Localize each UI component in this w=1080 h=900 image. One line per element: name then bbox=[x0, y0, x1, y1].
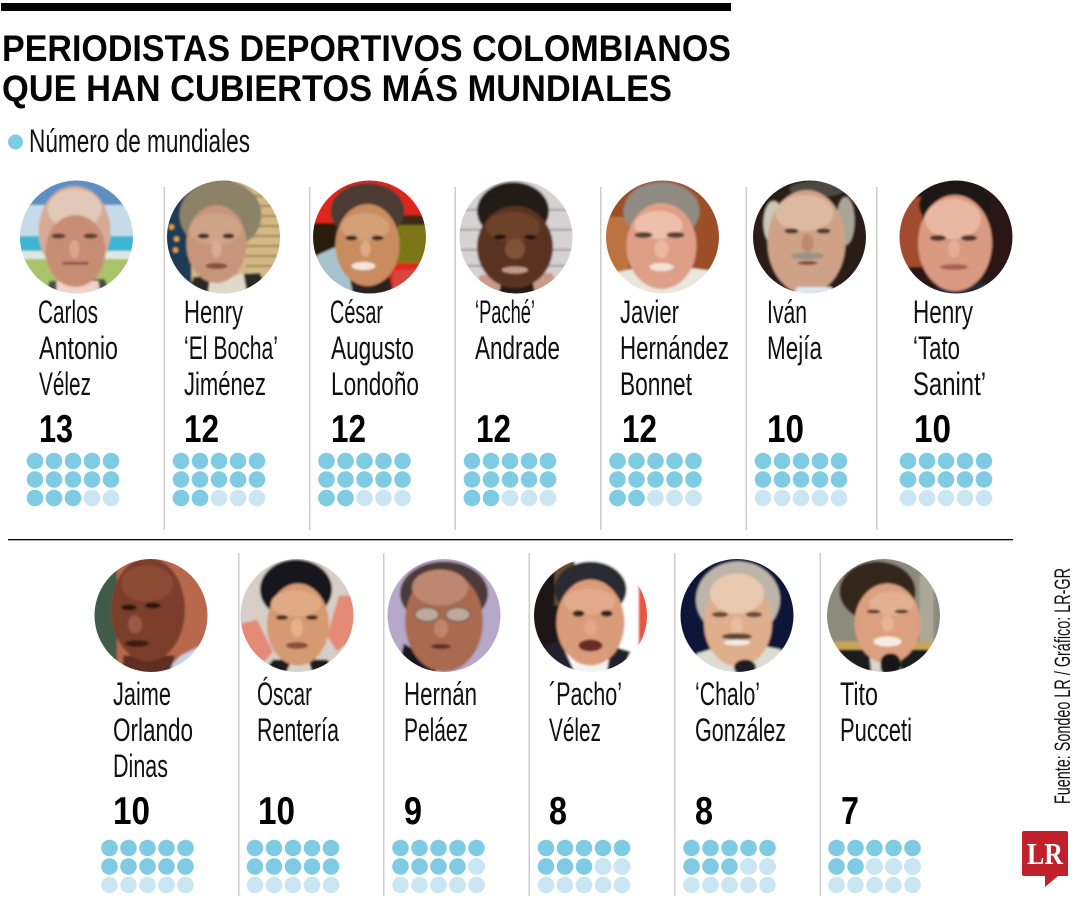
portrait: Jaime Orlando Dinas bbox=[94, 559, 208, 672]
name: Jiménez bbox=[184, 366, 266, 402]
card: Henry 'Tato Sanint' bbox=[896, 177, 1016, 506]
card: Tito Pucceti bbox=[824, 556, 944, 893]
card: César Augusto Londoño bbox=[310, 177, 432, 506]
name bbox=[257, 676, 339, 748]
card: Óscar Rentería bbox=[237, 556, 357, 893]
name bbox=[330, 294, 419, 402]
logo: LR bbox=[1022, 831, 1068, 887]
dots bbox=[609, 453, 702, 506]
value: 12 bbox=[331, 408, 366, 451]
name bbox=[38, 294, 118, 402]
name: Rentería bbox=[257, 712, 339, 748]
name: Andrade bbox=[475, 330, 560, 366]
name: Londoño bbox=[331, 366, 419, 402]
title bbox=[2, 28, 731, 109]
name: Tito bbox=[840, 676, 878, 712]
name bbox=[913, 294, 986, 402]
dots bbox=[755, 453, 847, 506]
value: 10 bbox=[258, 790, 295, 833]
card: Jaime Orlando Dinas bbox=[91, 556, 211, 893]
value: 8 bbox=[549, 790, 567, 833]
name bbox=[620, 294, 729, 402]
value: 13 bbox=[39, 408, 73, 451]
dots bbox=[27, 453, 119, 506]
dots bbox=[101, 840, 194, 893]
value: 10 bbox=[113, 790, 150, 833]
card: Javier Hernández Bonnet bbox=[602, 177, 729, 506]
name: Henry bbox=[913, 294, 973, 330]
name: Henry bbox=[184, 294, 243, 330]
name: Vélez bbox=[549, 712, 601, 748]
card: Iván Mejía bbox=[750, 177, 870, 506]
name: Sanint’ bbox=[913, 366, 986, 402]
legend: Número de mundiales bbox=[29, 123, 250, 159]
name: Orlando bbox=[113, 712, 193, 748]
top rule bbox=[1, 3, 731, 11]
legend bbox=[8, 123, 250, 159]
value: 7 bbox=[841, 790, 859, 833]
portrait: Hernán Peláez bbox=[388, 559, 500, 672]
name: ‘Chalo’ bbox=[695, 676, 760, 712]
name: González bbox=[695, 712, 786, 748]
dots bbox=[392, 840, 485, 893]
value: 12 bbox=[476, 408, 511, 451]
name bbox=[113, 676, 193, 784]
portrait: Javier Hernández Bonnet bbox=[606, 180, 719, 294]
name bbox=[695, 676, 786, 748]
name: Peláez bbox=[404, 712, 468, 748]
value: 12 bbox=[622, 408, 657, 451]
dots bbox=[173, 453, 265, 506]
value: 9 bbox=[404, 790, 422, 833]
name: ‘Paché’ bbox=[475, 294, 535, 330]
name: ‘Tato bbox=[913, 330, 960, 366]
name: Mejía bbox=[767, 330, 822, 366]
title: QUE HAN CUBIERTOS MÁS MUNDIALES bbox=[2, 68, 672, 109]
portrait: Carlos Antonio Vélez bbox=[20, 180, 133, 294]
title: PERIODISTAS DEPORTIVOS COLOMBIANOS bbox=[2, 28, 731, 69]
value: 8 bbox=[695, 790, 713, 833]
name: ‘El Bocha’ bbox=[184, 330, 278, 366]
card: 'Paché' Andrade bbox=[456, 177, 576, 506]
name: César bbox=[330, 294, 383, 330]
card: 'Pacho' Vélez bbox=[530, 556, 652, 893]
name: Javier bbox=[620, 294, 679, 330]
name: Carlos bbox=[38, 294, 98, 330]
portrait: Paché Andrade bbox=[460, 180, 572, 294]
dots bbox=[900, 453, 992, 506]
name: Hernán bbox=[404, 676, 477, 712]
portrait: Chalo González bbox=[680, 559, 794, 672]
card: 'Chalo' González bbox=[677, 556, 797, 893]
name bbox=[549, 676, 622, 748]
value: 10 bbox=[767, 408, 804, 451]
dots bbox=[683, 840, 776, 893]
name: Augusto bbox=[331, 330, 414, 366]
portrait: Pacho Vélez bbox=[534, 560, 647, 672]
dots bbox=[464, 453, 556, 506]
dots bbox=[828, 840, 921, 893]
portrait: Tito Pucceti bbox=[827, 559, 940, 672]
name: Antonio bbox=[39, 330, 118, 366]
dots bbox=[318, 453, 411, 506]
logo: LR: LR bbox=[1027, 836, 1064, 871]
name: Óscar bbox=[257, 676, 312, 712]
card: Carlos Antonio Vélez bbox=[16, 177, 136, 506]
portrait: Óscar Rentería bbox=[240, 559, 354, 672]
source note: Fuente: Sondeo LR / Gráfico: LR-GR bbox=[1050, 568, 1075, 804]
name: Jaime bbox=[113, 676, 171, 712]
dots bbox=[247, 840, 339, 893]
dots bbox=[538, 840, 630, 893]
name: Pucceti bbox=[840, 712, 912, 748]
value: 10 bbox=[914, 408, 951, 451]
portrait: César Augusto Londoño bbox=[313, 180, 426, 294]
portrait: Iván Mejía bbox=[753, 180, 866, 294]
name: Vélez bbox=[39, 366, 91, 402]
name: Iván bbox=[767, 294, 807, 330]
name: Bonnet bbox=[620, 366, 692, 402]
name bbox=[475, 294, 560, 366]
name: Hernández bbox=[620, 330, 729, 366]
portrait: Henry El Bocha Jiménez bbox=[167, 180, 280, 294]
card: Hernán Peláez bbox=[384, 556, 504, 893]
value: 12 bbox=[184, 408, 219, 451]
name bbox=[840, 676, 912, 748]
name: ´Pacho’ bbox=[549, 676, 622, 712]
name bbox=[404, 676, 477, 748]
card: Henry 'El Bocha' Jiménez bbox=[164, 177, 286, 506]
name bbox=[767, 294, 822, 366]
name: Dinas bbox=[113, 748, 168, 784]
name bbox=[184, 294, 278, 402]
portrait: Henry Tato Sanint bbox=[900, 180, 1012, 294]
